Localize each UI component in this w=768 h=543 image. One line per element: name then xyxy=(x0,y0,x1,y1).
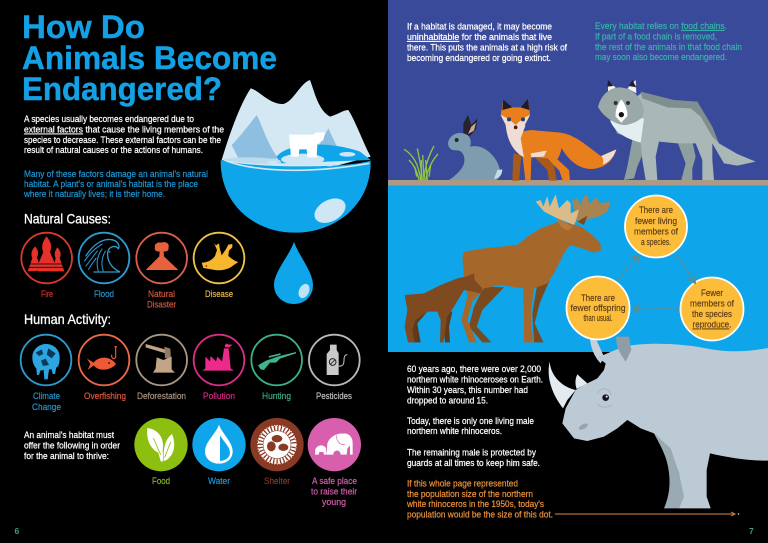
icon: polar bear xyxy=(289,132,325,157)
habitat damage text: becoming endangered or going extinct. xyxy=(407,53,551,63)
food chain text: may soon also become endangered. xyxy=(595,52,727,62)
habitat definition text: Many of these factors damage an animal's natural xyxy=(24,169,208,179)
icon: fire xyxy=(21,233,72,283)
illustration: rhino xyxy=(549,336,768,508)
rhino facts text xyxy=(407,364,543,468)
melting iceberg globe illustration xyxy=(221,80,371,233)
habitat damage text: there. This puts the animals at a high risk of xyxy=(407,42,567,52)
habitat need labels: young xyxy=(322,497,346,507)
rhino facts text: Within 30 years, this number had xyxy=(407,385,528,395)
food chain text: If part of a food chain is removed, xyxy=(595,32,717,42)
cycle circle: fewer offspring: There are xyxy=(581,293,615,303)
intro text block: species to decrease. These external factors can be the xyxy=(24,135,221,145)
natural cause labels: Flood xyxy=(94,289,114,299)
cycle circle: fewer offspring: than usual. xyxy=(584,313,612,323)
human activity labels: Pesticides xyxy=(316,391,352,401)
page number 6: 6 xyxy=(14,526,20,536)
habitat need labels: Water xyxy=(208,476,230,486)
illustration: bull moose xyxy=(461,194,611,342)
natural cause labels: Disease xyxy=(205,289,233,299)
human activity labels: Overfishing xyxy=(84,391,126,401)
human activity labels: Pollution xyxy=(203,391,235,401)
habitat definition text: where it naturally lives; it is their home. xyxy=(23,189,165,199)
intro text block xyxy=(24,114,224,155)
icon: deforestation xyxy=(136,335,187,385)
habitat needs text: for the animal to thrive: xyxy=(24,451,109,461)
cycle circle: fewer living members xyxy=(625,196,687,258)
intro text block: A species usually becomes endangered due to xyxy=(24,114,194,124)
habitat damage text xyxy=(407,22,567,63)
cycle circle: fewer living members: There are xyxy=(639,205,673,215)
panel: cyan moose background xyxy=(388,186,768,352)
human activity labels: Change xyxy=(32,402,61,412)
icon: overfishing xyxy=(79,335,129,385)
icon: pollution xyxy=(194,335,244,385)
food chain text: Every habitat relies on food chains. xyxy=(595,21,727,31)
title xyxy=(22,9,277,107)
arrow: living to reproduce xyxy=(677,255,695,283)
natural cause labels: Disaster xyxy=(147,300,176,310)
rhino facts text: northern white rhinoceros. xyxy=(407,426,502,436)
rhino facts text: The remaining male is protected by xyxy=(407,448,536,458)
rhino facts text: northern white rhinoceroses on Earth. xyxy=(407,374,543,384)
habitat definition text xyxy=(23,169,208,199)
intro text block: external factors that cause the living members of the xyxy=(24,124,224,134)
habitat need labels: to raise their xyxy=(311,486,357,496)
icon: shelter nest xyxy=(250,418,304,471)
rhino facts text: Today, there is only one living male xyxy=(407,416,534,426)
habitat need labels xyxy=(152,476,357,507)
rhino facts text: dropped to around 15. xyxy=(407,396,488,406)
cycle circle: fewer reproduce: members of xyxy=(690,298,734,308)
natural cause labels xyxy=(41,289,233,310)
illustration: moose calf xyxy=(405,273,482,342)
cycle circle: fewer reproduce xyxy=(680,278,744,340)
icon: safe place elephants xyxy=(308,418,361,471)
habitat damage text: If a habitat is damaged, it may become xyxy=(407,22,552,32)
food chain text xyxy=(595,21,742,62)
title: Animals Become xyxy=(22,40,277,76)
cycle circle: fewer living members: a species. xyxy=(641,237,671,247)
habitat needs text xyxy=(24,430,120,461)
illustration: rabbit xyxy=(448,115,502,180)
title: How Do xyxy=(22,9,145,45)
human activity labels xyxy=(32,391,352,412)
natural cause labels: Fire xyxy=(41,289,53,299)
icon: pesticides xyxy=(309,335,360,385)
population comparison text: If this whole page represented xyxy=(407,478,518,488)
human activity labels: Deforestation xyxy=(137,391,186,401)
heading: natural causes: Natural Causes: xyxy=(24,210,111,226)
population comparison text: the population size of the northern xyxy=(407,489,533,499)
cycle circle: fewer offspring: fewer offspring xyxy=(570,303,626,313)
cycle circle: fewer offspring xyxy=(566,276,630,340)
icon: flood wave xyxy=(79,233,129,283)
illustration: fox xyxy=(501,99,616,181)
habitat needs text: An animal's habitat must xyxy=(24,430,114,440)
icon: water xyxy=(192,418,246,471)
icon: climate change xyxy=(21,335,71,385)
icon: food xyxy=(134,418,188,471)
icon: disease xyxy=(194,233,244,283)
habitat need labels: A safe place xyxy=(312,476,357,486)
panel: ground strip xyxy=(388,180,768,186)
human activity labels: Hunting xyxy=(262,391,291,401)
icon: volcano xyxy=(136,233,187,283)
panel: forest habitat background xyxy=(388,0,768,180)
arrow to population dot xyxy=(555,512,739,516)
natural cause labels: Natural xyxy=(148,289,175,299)
cycle circle: fewer reproduce: Fewer xyxy=(701,288,723,298)
rhino facts text: 60 years ago, there were over 2,000 xyxy=(407,364,541,374)
title: Endangered? xyxy=(22,71,222,107)
icon: hunting rifle xyxy=(251,335,302,385)
cycle circle: fewer reproduce: the species xyxy=(692,309,732,319)
population comparison text: white rhinoceros in the 1950s, today's xyxy=(406,499,544,509)
population comparison text: population would be the size of this dot. xyxy=(407,510,553,520)
illustration: grass xyxy=(404,146,438,180)
illustration: wolf xyxy=(598,80,756,180)
habitat need labels: Shelter xyxy=(264,476,290,486)
human activity labels: Climate xyxy=(33,391,60,401)
population comparison text xyxy=(406,478,553,520)
food chain text: the rest of the animals in that food chain xyxy=(595,42,742,52)
heading: human activity: Human Activity: xyxy=(24,311,111,327)
habitat damage text: uninhabitable for the animals that live xyxy=(407,32,552,42)
arrow: offspring to living xyxy=(617,256,638,281)
cycle circle: fewer living members: fewer living xyxy=(635,216,677,226)
intro text block: result of natural causes or the actions of humans. xyxy=(24,145,203,155)
habitat needs text: offer the following in order xyxy=(24,440,120,450)
rhino facts text: guards at all times to keep him safe. xyxy=(407,458,540,468)
water drop xyxy=(274,242,313,304)
cycle circle: fewer living members: members of xyxy=(634,226,678,236)
cycle circle: fewer reproduce: reproduce. xyxy=(692,320,732,330)
page number 7: 7 xyxy=(749,526,754,536)
habitat definition text: habitat. A plant's or animal's habitat is the place xyxy=(24,179,198,189)
arrow: reproduce to offspring xyxy=(634,305,679,313)
habitat need labels: Food xyxy=(152,476,170,486)
